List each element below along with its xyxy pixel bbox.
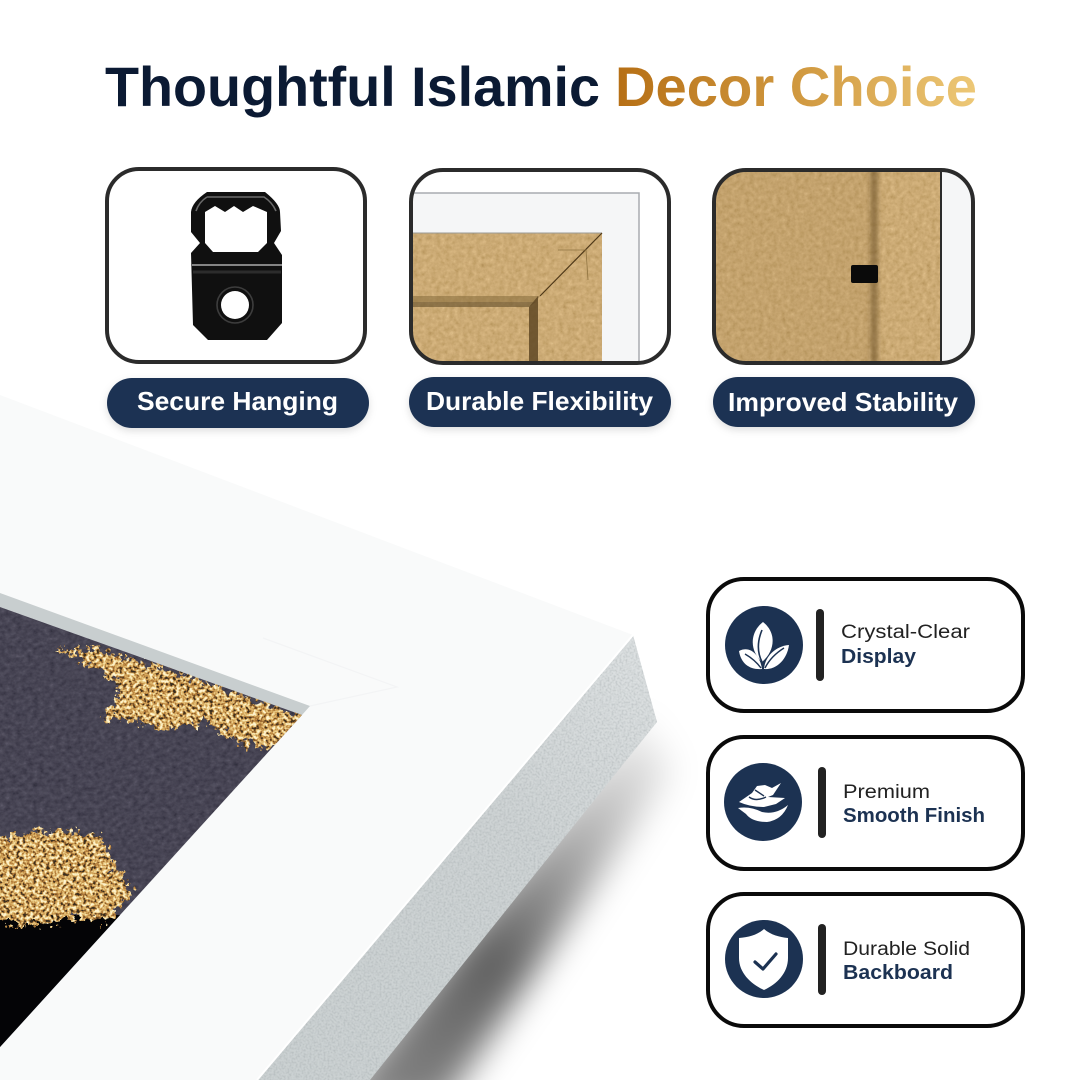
frame side	[257, 635, 657, 1080]
label pill: secure hanging: Secure Hanging	[137, 386, 338, 416]
feature text: Display	[841, 646, 917, 668]
icon: black hanger	[191, 192, 282, 340]
feature card: premium smooth finish	[708, 737, 1023, 869]
divider bar	[818, 767, 826, 838]
feature text	[843, 782, 985, 827]
label pill: improved stability	[713, 377, 975, 427]
feature text: Durable Solid	[843, 939, 970, 960]
title: Decor Choice	[615, 55, 977, 118]
feature text: Crystal-Clear	[841, 622, 971, 643]
divider bar	[816, 609, 824, 681]
label pill: improved stability: Improved Stability	[728, 387, 959, 417]
icon: leaves	[725, 606, 803, 684]
feature text: Smooth Finish	[843, 805, 985, 827]
photo card: backboard corner	[409, 168, 671, 365]
framed picture corner	[0, 593, 674, 1080]
label pill: durable flexibility	[409, 377, 671, 427]
label pill: secure hanging	[107, 378, 369, 428]
photo card: sawtooth hanger	[107, 169, 365, 362]
panel: durable flexibility	[409, 168, 671, 427]
black lower area	[0, 915, 120, 1047]
feature card: durable solid backboard	[708, 894, 1023, 1026]
photo card: backboard with clip	[712, 160, 975, 372]
title	[105, 55, 977, 118]
framed artwork	[0, 607, 312, 1060]
divider bar	[818, 924, 826, 995]
feature text	[841, 622, 971, 668]
panel: improved stability	[712, 160, 975, 427]
feature text	[843, 939, 970, 984]
feature text: Premium	[843, 782, 930, 803]
frame cast shadow	[330, 715, 672, 1080]
gold leaf upper	[58, 650, 312, 752]
frame face	[0, 395, 633, 1080]
frame inner lip	[0, 593, 310, 715]
icon: shield with check	[725, 920, 803, 998]
icon: smoothing hand over waves	[724, 763, 802, 841]
feature card: crystal-clear display	[708, 579, 1023, 711]
feature text: Backboard	[843, 962, 953, 984]
label pill: durable flexibility: Durable Flexibility	[426, 386, 654, 416]
title: Thoughtful Islamic	[105, 55, 600, 118]
gold leaf lower	[0, 830, 132, 926]
panel: secure hanging	[107, 169, 369, 428]
